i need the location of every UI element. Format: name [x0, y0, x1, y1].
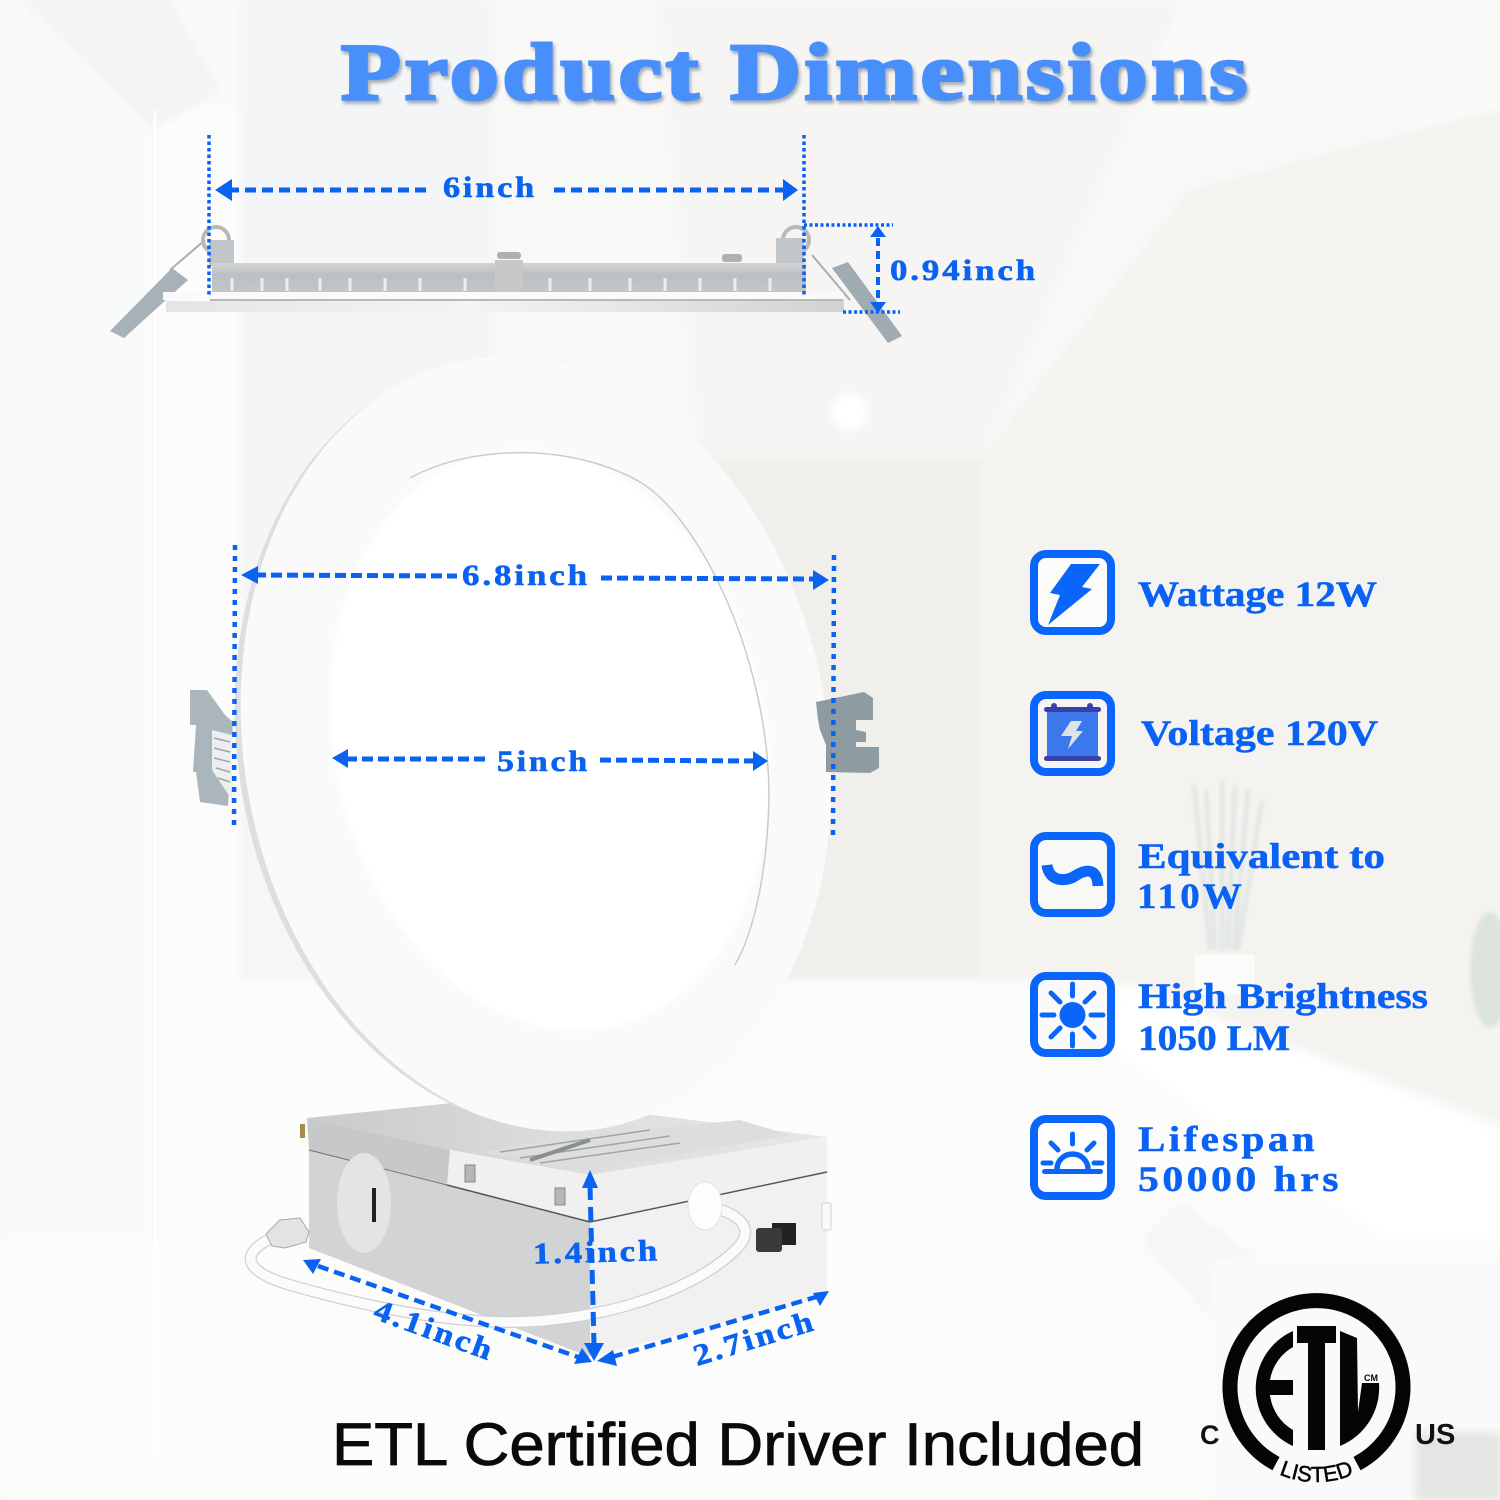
feature: wattage	[1034, 554, 1377, 631]
dimension: 2.7inch depth: 2.7inch	[689, 1304, 820, 1373]
C mark: C	[1200, 1420, 1220, 1450]
grommet	[688, 1182, 722, 1230]
right mounting clip	[776, 227, 902, 343]
label: 110W	[1137, 876, 1245, 916]
side spring clip: left	[190, 690, 233, 806]
outer edge shadow	[175, 312, 889, 1178]
outer ring	[1230, 1301, 1403, 1464]
dimension: 5inch lens width	[332, 745, 768, 778]
dimension: 5inch lens width: 5inch	[497, 745, 590, 778]
round panel light	[175, 309, 891, 1179]
side spring clip: right	[816, 692, 879, 773]
dimension: 1.4inch height: 1.4inch	[533, 1234, 660, 1271]
icon: wave	[1034, 836, 1111, 913]
dimension: 6inch width: 6inch	[443, 171, 537, 204]
label: Voltage 120V	[1141, 713, 1378, 753]
left mounting clip	[110, 227, 234, 338]
soft ceiling lamp glow	[832, 394, 868, 430]
icon: sunrise	[1034, 1119, 1111, 1196]
left lid	[307, 1118, 450, 1185]
trim plate	[163, 292, 843, 300]
letter T	[1297, 1326, 1336, 1450]
icon: sun	[1034, 976, 1111, 1053]
heatsink body	[212, 263, 806, 292]
front lid	[447, 1137, 827, 1222]
cable connector	[266, 1218, 309, 1248]
caption: ETL certified driver: ETL Certified Driver Included	[332, 1411, 1144, 1478]
feature: brightness	[1034, 976, 1428, 1058]
left side face	[309, 1150, 590, 1357]
dimension: 4.1inch length: 4.1inch	[370, 1294, 499, 1368]
product side view: thin panel light	[110, 227, 902, 343]
clip on right	[822, 1203, 831, 1230]
slide switch	[772, 1223, 796, 1245]
label	[1138, 1119, 1342, 1199]
dimension: 0.94inch height	[804, 225, 1038, 313]
label: Wattage 12W	[1138, 574, 1377, 614]
letter L	[1340, 1331, 1379, 1446]
dimension: 2.7inch depth	[597, 1291, 829, 1373]
LISTED text: LISTED	[1280, 1460, 1352, 1482]
feature: lifespan	[1034, 1119, 1342, 1199]
dimension: 1.4inch height	[533, 1170, 660, 1361]
icon: lightning bolt	[1034, 554, 1111, 631]
dimension: 4.1inch length	[303, 1259, 592, 1368]
square windows	[465, 1165, 475, 1182]
label: 50000 hrs	[1138, 1159, 1342, 1199]
dimension: 6inch width	[209, 135, 804, 296]
knockout with slot	[337, 1153, 391, 1253]
label: Lifespan	[1138, 1119, 1318, 1159]
feature: equivalent wattage	[1034, 836, 1385, 916]
ETL listed certification mark	[1200, 1293, 1455, 1482]
label	[1138, 976, 1428, 1058]
feature: voltage	[1034, 695, 1378, 772]
dimension: 6.8inch width: 6.8inch	[462, 559, 590, 592]
junction box driver	[251, 1097, 831, 1357]
label: Equivalent to	[1138, 836, 1385, 876]
label plate on top of box	[480, 1120, 790, 1170]
top face	[307, 1097, 827, 1175]
label	[1137, 836, 1385, 916]
title: Product Dimensions	[341, 29, 1251, 117]
right side face	[590, 1172, 827, 1357]
US mark: US	[1415, 1419, 1455, 1451]
outer trim ring	[181, 309, 891, 1179]
terminal screw	[300, 1124, 305, 1138]
CM mark: CM	[1364, 1373, 1378, 1383]
label: 1050 LM	[1138, 1018, 1290, 1058]
icon: battery	[1034, 695, 1111, 772]
inner lens	[278, 408, 822, 1072]
dimension: 6.8inch width	[234, 545, 834, 835]
dimension: 0.94inch height: 0.94inch	[890, 254, 1038, 287]
power cable	[251, 1206, 745, 1322]
letter E	[1256, 1331, 1293, 1446]
label: High Brightness	[1138, 976, 1428, 1016]
